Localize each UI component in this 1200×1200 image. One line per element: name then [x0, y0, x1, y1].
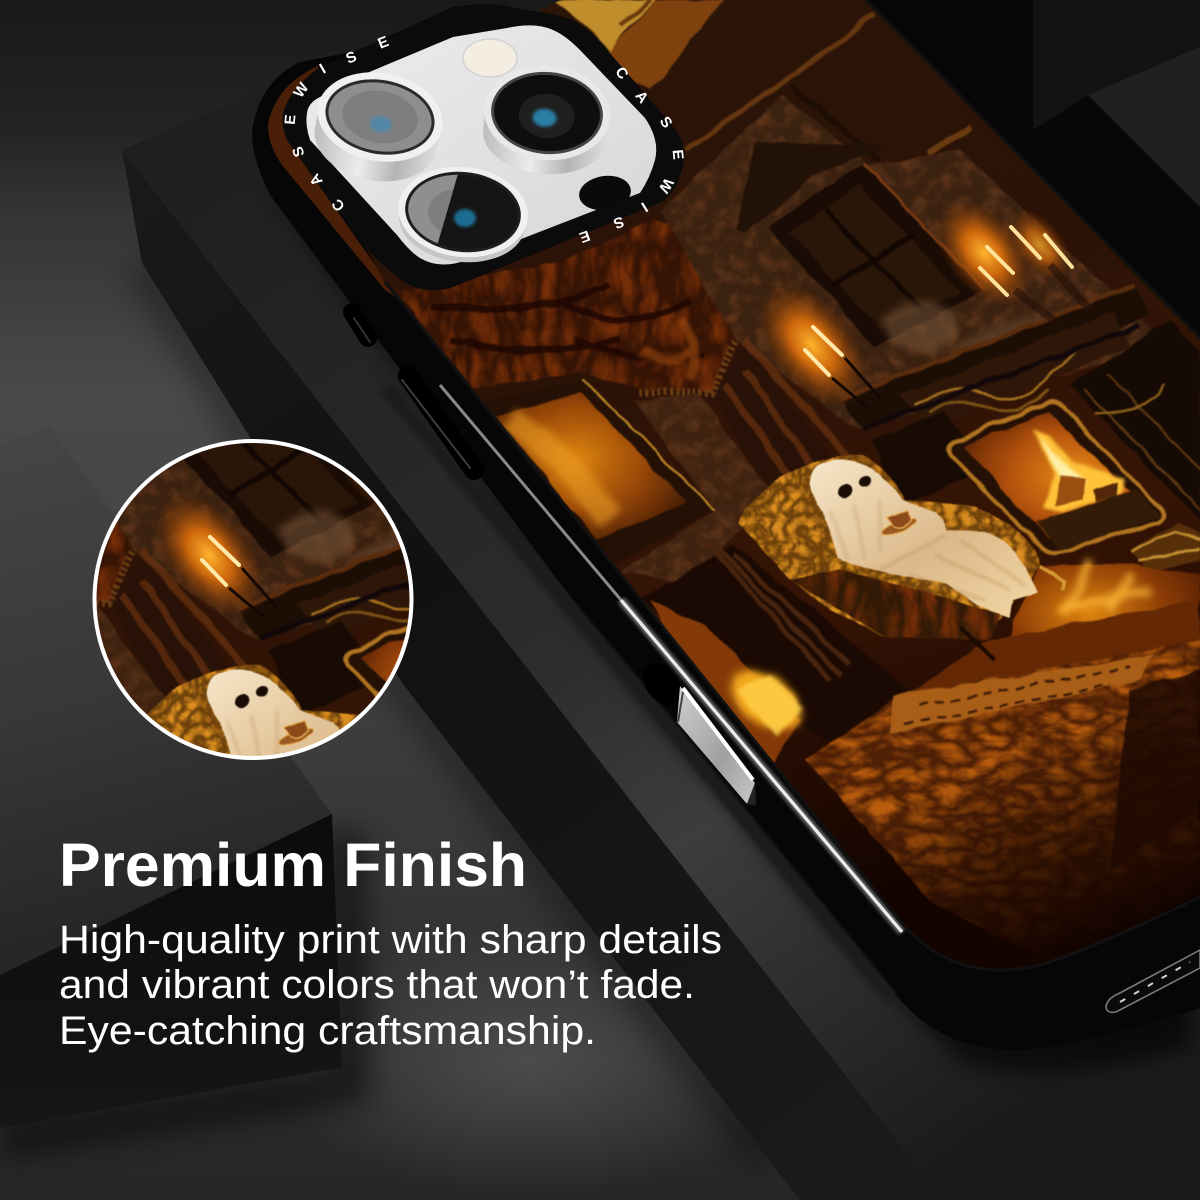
inner screen rim — [385, 0, 1200, 970]
candle glow: upper — [916, 181, 1090, 325]
art sliver beside camera — [268, 65, 400, 300]
wood floor — [912, 602, 1194, 692]
description text: and vibrant colors that won’t fade. — [59, 963, 695, 1007]
CASEWISE ring lettering — [282, 33, 686, 246]
glossy edge highlight — [440, 385, 902, 932]
hearth floor — [1010, 554, 1200, 637]
flash — [463, 39, 517, 77]
curtain — [395, 220, 735, 394]
description text — [59, 918, 722, 1053]
window glow at top — [555, 0, 725, 90]
camera island — [282, 4, 686, 290]
right wall ornaments — [1070, 320, 1200, 520]
mirror pediment — [735, 143, 886, 232]
top right panel — [1033, 0, 1200, 130]
charging port — [1106, 950, 1200, 1012]
top right block — [1088, 47, 1200, 207]
printed artwork: haunted parlour — [366, 0, 1200, 968]
main block side face — [122, 150, 943, 1200]
CASEWISE ring lettering: E — [577, 227, 592, 246]
soft shadow beside left block — [0, 830, 350, 1140]
ring repaint over sensor — [570, 180, 665, 235]
left block top face — [0, 427, 332, 975]
dark framed window — [768, 163, 1070, 375]
CASEWISE ring lettering: W — [654, 175, 677, 197]
wallpaper wall — [660, 95, 1170, 430]
candle glow: lower — [735, 262, 889, 428]
CASEWISE ring lettering: I — [638, 199, 651, 215]
action button — [352, 312, 370, 342]
lens top left — [307, 63, 450, 191]
lidar sensor — [577, 173, 633, 213]
teacup — [880, 510, 918, 539]
CASEWISE ring lettering: C — [612, 64, 632, 83]
CASEWISE ring lettering: E — [282, 114, 299, 125]
lens bottom — [398, 167, 528, 262]
wallpaper beside painting — [620, 395, 770, 585]
dark backdrop top right — [862, 0, 1200, 345]
camera plate — [306, 25, 656, 265]
lens top right — [479, 61, 614, 179]
upper wall beams — [686, 15, 972, 160]
description text: High-quality print with sharp details — [59, 918, 722, 962]
zoom detail circle — [92, 439, 414, 760]
soft shadow beside main block — [142, 263, 770, 1160]
CASEWISE ring lettering: E — [375, 33, 391, 53]
CASEWISE ring lettering: I — [317, 61, 329, 78]
side gloss — [386, 388, 891, 998]
ghost — [810, 459, 1038, 618]
books — [1128, 522, 1200, 572]
glowing painting — [483, 380, 715, 567]
volume button — [402, 376, 474, 470]
power button silver — [635, 655, 756, 806]
CASEWISE ring lettering: S — [343, 48, 359, 68]
left block side face — [0, 814, 342, 1128]
ghost eyes — [835, 473, 873, 500]
mantel with carving — [842, 285, 1150, 505]
armchair — [738, 455, 1065, 660]
drapery stripes — [715, 340, 860, 500]
lower column and shadow — [640, 535, 910, 745]
CASEWISE ring lettering: A — [632, 88, 652, 107]
CASEWISE ring lettering: S — [611, 213, 626, 232]
black bumper ring — [282, 4, 684, 290]
phone case body — [252, 0, 1200, 1050]
CASEWISE ring lettering: S — [656, 113, 676, 131]
CASEWISE ring lettering: A — [306, 170, 326, 189]
heading: Premium Finish — [59, 831, 527, 899]
CASEWISE ring lettering: W — [290, 79, 313, 101]
painted room — [280, 0, 1200, 990]
CASEWISE ring lettering: E — [669, 149, 686, 160]
lower fire — [650, 600, 812, 765]
fireplace — [949, 401, 1164, 552]
description text: Eye-catching craftsmanship. — [59, 1009, 596, 1053]
rug — [806, 640, 1200, 962]
CASEWISE ring lettering: C — [328, 195, 349, 215]
CASEWISE ring lettering: S — [289, 144, 308, 159]
floor light pool — [270, 925, 790, 1195]
phone shadow — [255, 170, 1190, 1072]
